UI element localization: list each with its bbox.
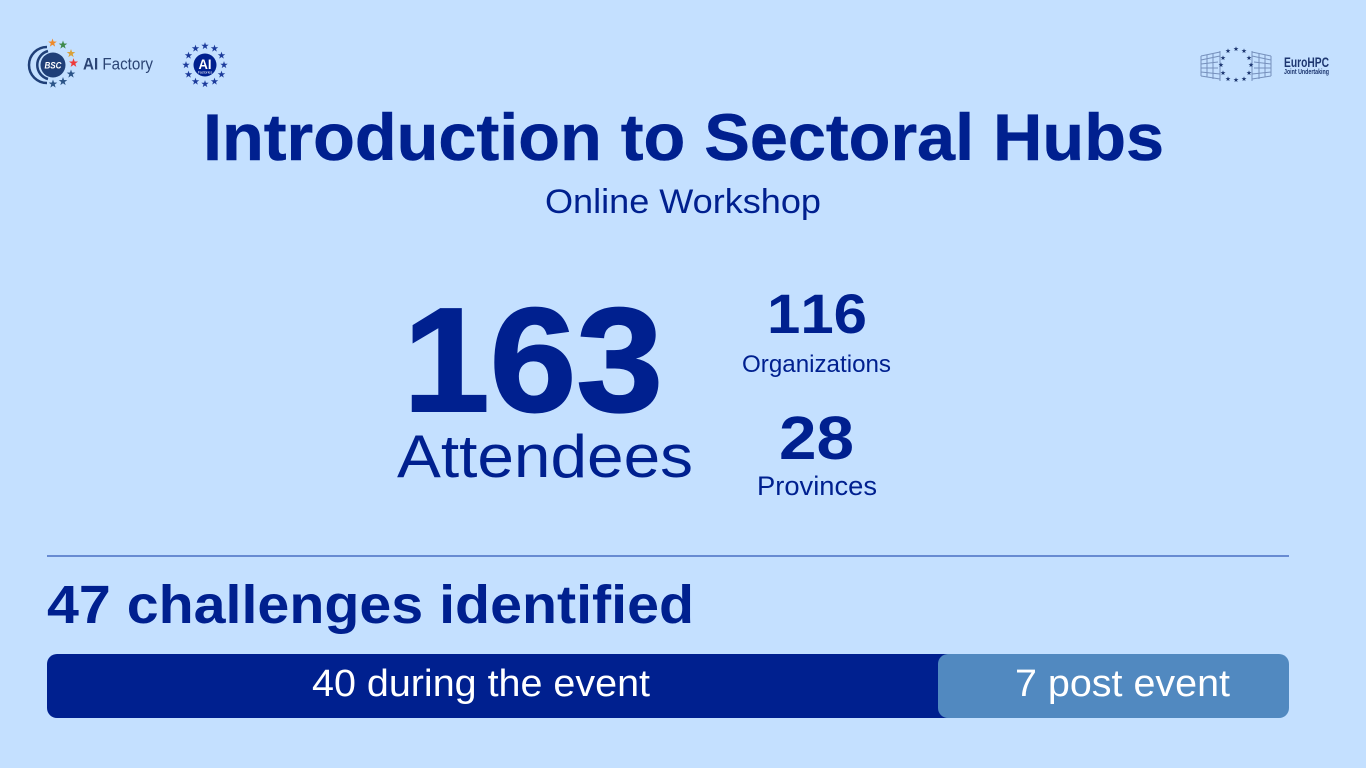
segment: 40 during the event xyxy=(47,654,957,718)
segment: 7 post event: 7 post event xyxy=(1015,663,1230,705)
logo: AI Factories star ring: Factories xyxy=(198,70,212,74)
segment: 40 during the event: 40 during the event xyxy=(312,663,650,705)
heading: 47 challenges identified: 47 challenges identified xyxy=(47,575,694,635)
stat: 116 organizations xyxy=(742,282,891,378)
stat: 116 organizations: 116 xyxy=(767,282,867,345)
logo: AI Factories star ring: AI xyxy=(198,56,212,72)
logo: BSC AI Factory: AI Factory xyxy=(83,56,154,74)
stat: 28 provinces: 28 xyxy=(779,404,854,472)
logo: BSC AI Factory xyxy=(29,38,154,88)
stat: 163 attendees: Attendees xyxy=(397,423,693,490)
logo: AI Factories star ring xyxy=(182,42,228,87)
logo: EuroHPC Joint Undertaking: EuroHPC xyxy=(1284,55,1329,70)
logo: EuroHPC Joint Undertaking xyxy=(1201,46,1329,82)
title: Introduction to Sectoral Hubs xyxy=(203,100,1164,174)
subtitle: Online Workshop xyxy=(545,183,821,221)
logo: BSC AI Factory: BSC xyxy=(44,60,62,70)
stat: 28 provinces: Provinces xyxy=(757,471,877,501)
logo: EuroHPC Joint Undertaking: Joint Undertaking xyxy=(1284,69,1329,76)
stat: 163 attendees: 163 xyxy=(403,278,663,443)
stat: 28 provinces xyxy=(757,404,877,501)
segment: 7 post event xyxy=(938,654,1289,718)
stat: 116 organizations: Organizations xyxy=(742,351,891,378)
stacked bar: challenges split xyxy=(47,654,1289,718)
stat: 163 attendees xyxy=(397,278,693,490)
